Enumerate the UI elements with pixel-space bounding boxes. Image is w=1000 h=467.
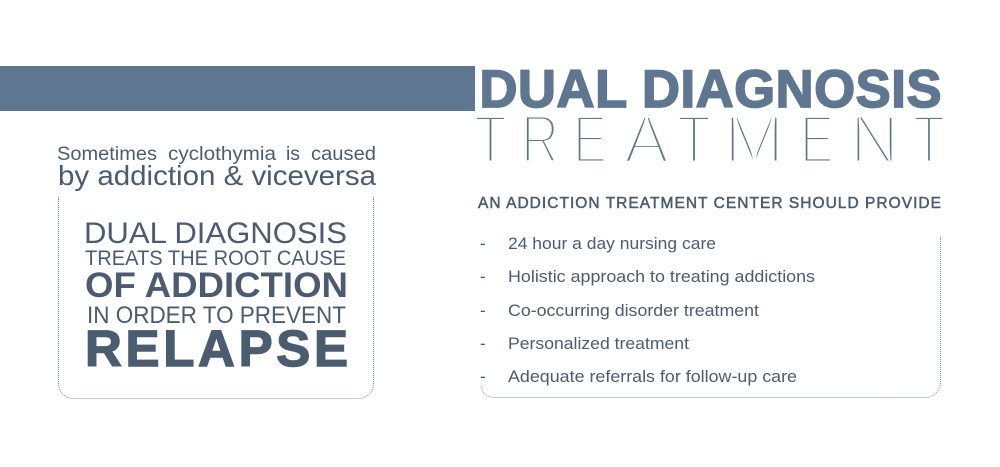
list of provisions — [480, 234, 815, 386]
intro line 1: caused — [311, 143, 376, 165]
subheading: AN ADDICTION TREATMENT CENTER SHOULD PROVIDE — [478, 195, 941, 212]
title line: treatment: T — [913, 101, 945, 177]
message line 5: RELAPSE — [85, 320, 348, 377]
intro line 1: Sometimes — [57, 143, 157, 165]
title line: treatment: T — [474, 101, 507, 177]
list item 3: - — [480, 301, 486, 320]
left intro text — [57, 143, 376, 191]
panel: left dotted box — [58, 197, 374, 398]
panel text: dual diagnosis message — [84, 217, 348, 377]
title line: treatment: T — [677, 101, 711, 177]
panel: right dotted box — [481, 236, 940, 398]
intro line 1: cyclothymia — [168, 143, 276, 165]
intro line 1 — [57, 143, 376, 165]
title line: treatment: E — [800, 101, 834, 177]
list item 5: - — [480, 367, 486, 386]
list item 4: - — [480, 334, 486, 353]
list item 1: 24 hour a day nursing care — [508, 234, 716, 253]
intro line 1: is — [286, 143, 300, 165]
list item 4: Personalized treatment — [508, 334, 689, 353]
list item 5: Adequate referrals for follow-up care — [508, 367, 797, 386]
title line: treatment: N — [850, 101, 899, 177]
header band — [0, 66, 475, 111]
title line: dual diagnosis: DUAL DIAGNOSIS — [480, 60, 942, 119]
title — [474, 60, 945, 177]
intro line 2: by addiction & viceversa — [58, 160, 376, 191]
message line 2: TREATS THE ROOT CAUSE — [85, 247, 346, 270]
list item 3: Co-occurring disorder treatment — [508, 301, 759, 320]
message line 3: OF ADDICTION — [85, 266, 348, 305]
title line: treatment: M — [724, 101, 785, 177]
message line 1: DUAL DIAGNOSIS — [84, 217, 347, 250]
title line: treatment: E — [573, 101, 607, 177]
list item 2: Holistic approach to treating addictions — [508, 267, 815, 286]
title line: treatment — [474, 101, 945, 177]
title line: treatment: A — [624, 101, 670, 177]
list item 2: - — [480, 267, 486, 286]
title line: treatment: R — [521, 101, 559, 177]
message line 4: IN ORDER TO PREVENT — [87, 302, 346, 329]
list item 1: - — [480, 234, 486, 253]
